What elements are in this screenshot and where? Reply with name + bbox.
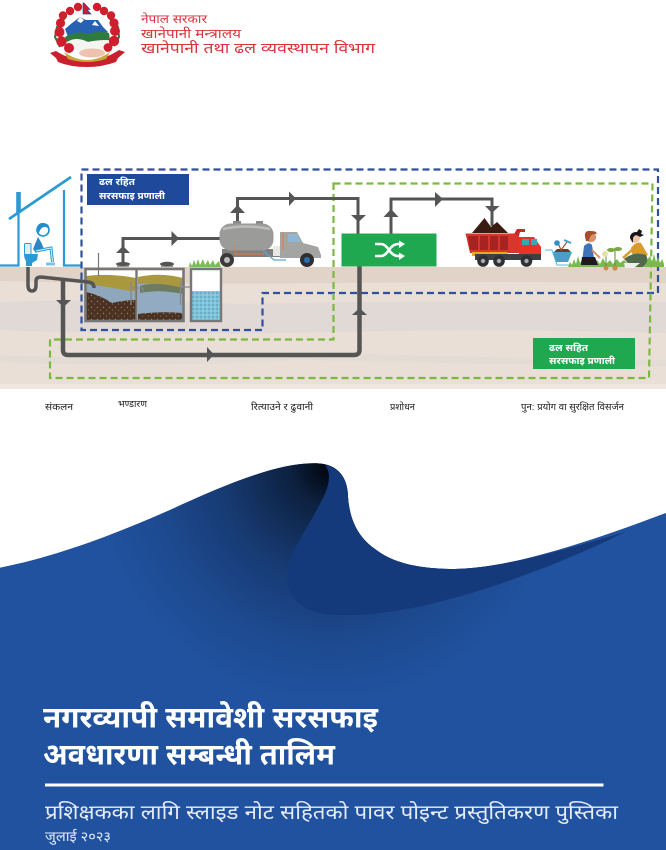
main title: अवधारणा सम्बन्धी तालिम [43, 738, 335, 772]
panel label: non-sewered sanitation system [87, 174, 189, 205]
ground layers [0, 267, 666, 389]
stage label: collection: संकलन [45, 401, 74, 413]
icon: vacuum tanker truck [220, 221, 321, 267]
panel label: non-sewered sanitation system: सरसफाइ प्रणाली [99, 190, 165, 202]
icon: woman gardening [623, 229, 648, 268]
icon: person seated on toilet [24, 223, 55, 266]
icon: red dump truck with soil [466, 218, 541, 267]
icon: treatment box with shuffle arrows [342, 234, 436, 266]
panel label: sewered sanitation system [533, 338, 635, 369]
header: ministry text: खानेपानी तथा ढल व्यवस्थापन विभाग [141, 39, 376, 56]
main title [43, 700, 379, 772]
header: ministry text: नेपाल सरकार [141, 11, 208, 26]
green dashed boundary: sewered sanitation [50, 184, 652, 378]
stage label: treatment: प्रशोधन [390, 401, 416, 413]
stage label: storage: भण्डारण [118, 399, 147, 410]
icon: garden cart with tools [545, 240, 572, 265]
title rule [45, 784, 604, 786]
stage label: emptying and transport: रित्याउने र ढुवानी [251, 401, 314, 413]
stage label: reuse or safe disposal: पुन: प्रयोग वा सुरक्षित विसर्जन [521, 401, 625, 413]
panel label: sewered sanitation system: ढल सहित [549, 342, 589, 354]
panel label: non-sewered sanitation system: ढल रहित [99, 176, 136, 188]
panel label: sewered sanitation system: सरसफाइ प्रणाली [549, 355, 615, 367]
septic tank [86, 253, 194, 321]
pipe: sewer line to treatment [56, 266, 367, 362]
blue wave background [0, 463, 666, 850]
logo: Nepal government emblem [50, 3, 125, 67]
icon: child gardening [581, 231, 600, 265]
date: जुलाई २०२३ [45, 828, 111, 846]
wave curl flap [288, 465, 625, 615]
soak pit with grass [189, 259, 221, 321]
header: ministry text [141, 11, 376, 56]
pipe: treatment to dump truck [384, 192, 500, 234]
house with blue outline [0, 177, 81, 266]
header: ministry text: खानेपानी मन्त्रालय [141, 26, 242, 41]
pipe: tank to vacuum truck [116, 231, 220, 263]
blue dashed boundary: non-sewered sanitation [82, 170, 658, 330]
main title: नगरव्यापी समावेशी सरसफाइ [43, 700, 379, 734]
pipe: vacuum truck to treatment [230, 192, 366, 234]
pipe: toilet trap and connection to tank [28, 267, 94, 291]
icon: grass and plants [568, 254, 664, 267]
subtitle: प्रशिक्षकका लागि स्लाइड नोट सहितको पावर पोइन्ट प्रस्तुतिकरण पुस्तिका [45, 800, 619, 825]
icon: seedlings in pots [602, 247, 622, 271]
